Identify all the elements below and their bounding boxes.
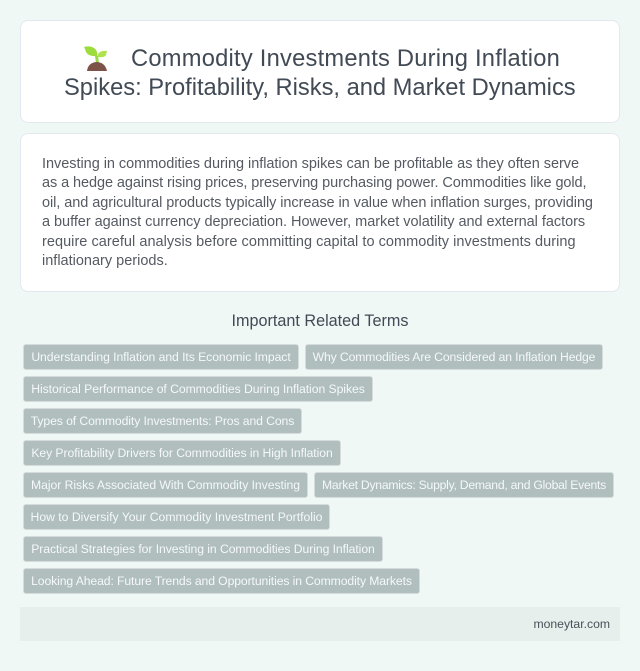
tag	[23, 504, 330, 530]
tag	[314, 472, 614, 498]
tag: Looking Ahead: Future Trends and Opportunities in Commodity Markets	[31, 574, 412, 588]
footer source: moneytar.com	[533, 617, 610, 631]
tag	[23, 440, 341, 466]
paragraph: a buffer against currency depreciation. However, market volatility and external factors	[42, 214, 585, 230]
paragraph	[42, 156, 593, 269]
tag: Market Dynamics: Supply, Demand, and Global Events	[322, 478, 606, 492]
paragraph: oil, and agricultural products typically increase in value when inflation surges, providing	[42, 195, 593, 211]
heading: related terms: Important Related Terms	[232, 312, 408, 330]
tag list	[23, 344, 614, 594]
tag	[23, 344, 299, 370]
footer bar	[20, 607, 620, 641]
tag	[23, 408, 302, 434]
panel: title card	[20, 20, 620, 123]
tag: Historical Performance of Commodities During Inflation Spikes	[31, 382, 365, 396]
title line 2: Spikes: Profitability, Risks, and Market Dynamics	[64, 75, 576, 101]
icon: seedling	[84, 46, 107, 71]
tag	[23, 472, 308, 498]
tag: Key Profitability Drivers for Commodities in High Inflation	[31, 446, 333, 460]
tag: Understanding Inflation and Its Economic Impact	[31, 350, 291, 364]
tag: Why Commodities Are Considered an Inflation Hedge	[313, 350, 595, 364]
tag	[23, 536, 383, 562]
tag	[23, 376, 373, 402]
paragraph: inflationary periods.	[42, 253, 168, 269]
paragraph: as a hedge against rising prices, preserving purchasing power. Commodities like gold,	[42, 175, 586, 191]
tag	[23, 568, 420, 594]
tag: Types of Commodity Investments: Pros and Cons	[31, 414, 294, 428]
paragraph: Investing in commodities during inflation spikes can be profitable as they often serve	[42, 156, 579, 172]
tag: Major Risks Associated With Commodity Investing	[31, 478, 300, 492]
tag	[305, 344, 603, 370]
paragraph: require careful analysis before committing capital to commodity investments during	[42, 234, 576, 250]
title line 1: Commodity Investments During Inflation	[131, 46, 560, 72]
panel: intro text	[20, 133, 620, 292]
tag: How to Diversify Your Commodity Investment Portfolio	[31, 510, 322, 524]
tag: Practical Strategies for Investing in Commodities During Inflation	[31, 542, 375, 556]
